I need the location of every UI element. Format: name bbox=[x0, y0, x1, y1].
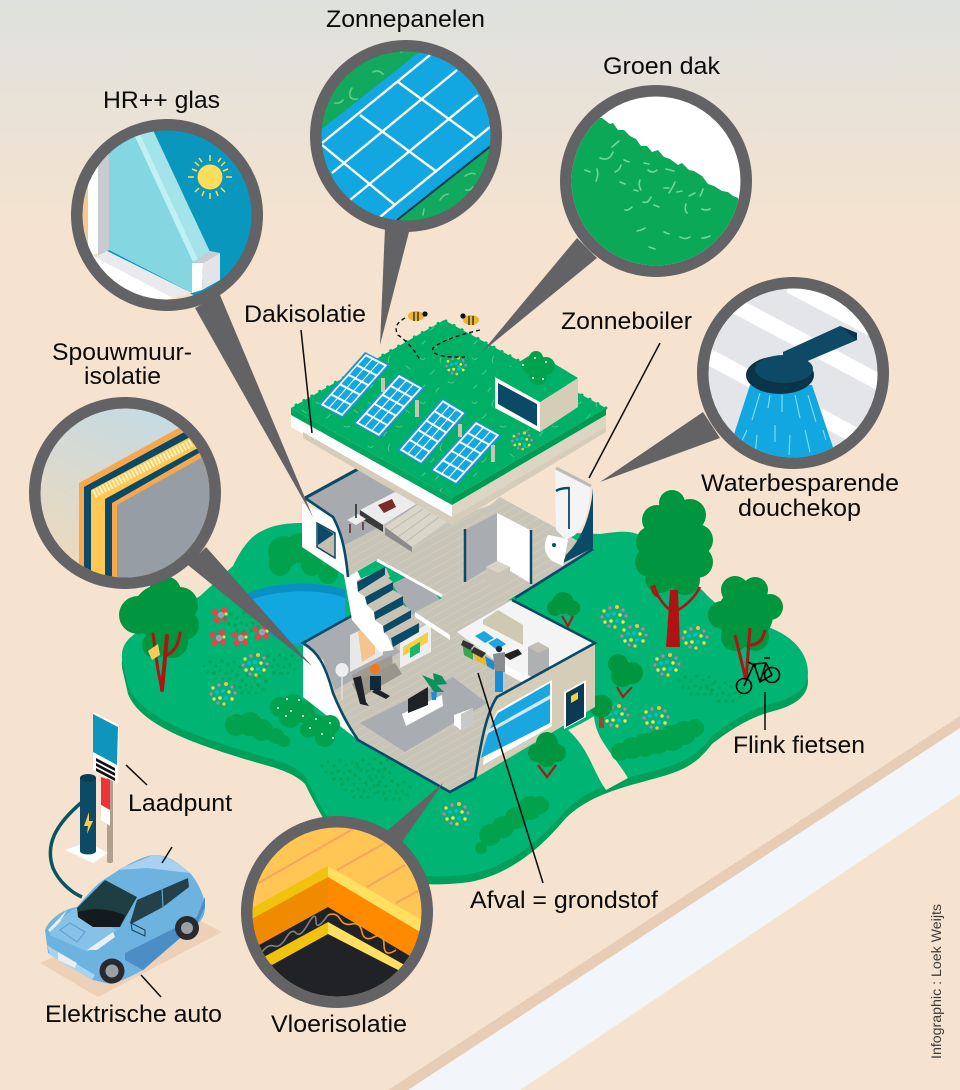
leader lines bbox=[126, 330, 765, 997]
label: Elektrische auto: Elektrische auto bbox=[45, 1001, 222, 1028]
back wall edge bbox=[305, 469, 358, 498]
tree: right with bike bbox=[708, 576, 783, 680]
callout: HR++ glas bbox=[71, 119, 263, 311]
garden flowers and speckles left bbox=[202, 611, 300, 706]
label: Vloerisolatie: Vloerisolatie bbox=[271, 1011, 407, 1038]
birdhouse bbox=[148, 644, 160, 660]
wheels bbox=[100, 916, 199, 984]
bed bbox=[360, 492, 450, 552]
headlights bbox=[48, 910, 115, 950]
label: Flink fietsen: Flink fietsen bbox=[733, 732, 865, 759]
bush: behind pond bbox=[268, 533, 338, 584]
hood bbox=[50, 908, 117, 952]
bush: white dotted front bbox=[270, 694, 340, 747]
label: Afval = grondstof: Afval = grondstof bbox=[470, 887, 658, 914]
sofa and person bbox=[352, 655, 402, 706]
floor slab bbox=[333, 470, 592, 635]
label: Waterbesparende douchekop: Waterbesparende bbox=[701, 470, 899, 497]
label: Laadpunt: Laadpunt bbox=[128, 790, 232, 817]
callout: Waterbesparende douchekop bbox=[697, 277, 895, 469]
upper floor bbox=[302, 468, 593, 652]
red flowers bbox=[210, 607, 269, 646]
tree: small beside house bbox=[590, 694, 612, 728]
rug bbox=[360, 677, 487, 752]
desk bbox=[347, 504, 366, 533]
roof flowers bbox=[445, 356, 533, 450]
label: Spouwmuurisolatie bbox=[52, 339, 192, 390]
label: Dakisolatie: Dakisolatie bbox=[244, 301, 366, 328]
label: Zonnepanelen: Zonnepanelen bbox=[326, 6, 485, 33]
front bumper bbox=[47, 945, 95, 980]
sign bbox=[93, 712, 119, 784]
body bbox=[45, 855, 205, 984]
mirror bbox=[131, 923, 145, 936]
label: HR++ glas: HR++ glas bbox=[103, 87, 220, 114]
left curved wall bbox=[303, 645, 358, 740]
white stair wall bbox=[343, 570, 394, 652]
tree: front bbox=[528, 732, 566, 777]
cube bbox=[454, 708, 473, 730]
window upper bbox=[317, 523, 335, 558]
roof highlight bbox=[117, 855, 190, 873]
floor outline bbox=[303, 600, 595, 792]
side windows bbox=[130, 878, 189, 923]
credit: Infographic : Loek Weijts bbox=[929, 904, 944, 1059]
pond bbox=[246, 584, 345, 645]
road bbox=[388, 716, 960, 1090]
garden path bbox=[568, 716, 628, 790]
plant bbox=[422, 673, 447, 700]
tree: left with birdhouse bbox=[119, 576, 199, 690]
shower head bbox=[746, 356, 814, 394]
floor bbox=[303, 600, 595, 792]
label: Zonneboiler: Zonneboiler bbox=[561, 308, 692, 335]
tv furniture bbox=[402, 687, 443, 726]
slab edge bbox=[415, 612, 450, 640]
label: Spouwmuurisolatie: Spouwmuur- bbox=[52, 339, 192, 366]
sky gradient bbox=[0, 0, 960, 230]
dormer bbox=[495, 351, 578, 432]
solar panels on roof bbox=[318, 352, 502, 485]
label: Spouwmuurisolatie: isolatie bbox=[84, 363, 161, 390]
lawn patch bbox=[320, 757, 470, 826]
base bbox=[65, 842, 108, 863]
door bbox=[564, 680, 586, 729]
inner wall bbox=[465, 513, 531, 588]
plate bbox=[58, 952, 77, 968]
shadow bbox=[40, 905, 222, 997]
tree: back right large bbox=[635, 490, 713, 647]
left wall upper bbox=[302, 503, 347, 577]
gap above stairs bbox=[392, 570, 440, 615]
kitchen bbox=[457, 600, 593, 684]
edge line bbox=[515, 549, 593, 598]
label: Waterbesparende douchekop: douchekop bbox=[738, 495, 861, 522]
wall curve bbox=[305, 498, 348, 577]
sun bbox=[188, 155, 232, 199]
bush: front right bbox=[611, 719, 704, 761]
callout: Spouwmuurisolatie bbox=[29, 397, 230, 590]
pillar bbox=[80, 774, 96, 854]
back wall bbox=[303, 611, 400, 690]
tree: behind kitchen bbox=[547, 592, 580, 626]
bicycle bbox=[736, 658, 780, 694]
tree: small near door bbox=[608, 654, 643, 697]
label: Waterbesparende douchekop bbox=[701, 470, 899, 522]
bush: bottom bbox=[475, 796, 549, 854]
curtain bbox=[350, 620, 383, 672]
ground floor bbox=[303, 600, 595, 792]
bathroom bbox=[545, 468, 593, 566]
bush: lower left bbox=[225, 712, 290, 747]
garden flowers right bbox=[600, 605, 745, 730]
standing person bbox=[493, 646, 505, 692]
electric car bbox=[40, 855, 222, 997]
green island bbox=[122, 523, 808, 884]
spray bbox=[734, 385, 833, 458]
stairs bbox=[357, 567, 419, 647]
callout tails bbox=[188, 228, 720, 842]
label: Groen dak: Groen dak bbox=[603, 53, 721, 80]
white line bbox=[377, 560, 442, 596]
hood panel bbox=[60, 923, 85, 942]
bees bbox=[396, 311, 480, 360]
side lower bbox=[125, 897, 205, 970]
floor lamp bbox=[336, 663, 348, 700]
cable bbox=[50, 802, 82, 897]
windshield bbox=[77, 880, 137, 927]
callout: Groen dak bbox=[560, 85, 752, 277]
window bbox=[481, 680, 552, 765]
sign pole bbox=[107, 777, 113, 863]
red panel bbox=[101, 777, 110, 826]
bookcase bbox=[400, 622, 431, 668]
facade bbox=[475, 643, 595, 778]
back wall gray bbox=[305, 470, 420, 545]
callout: Zonnepanelen bbox=[310, 40, 502, 232]
roof bbox=[291, 320, 606, 525]
charging point bbox=[50, 712, 119, 897]
callout: Vloerisolatie bbox=[241, 816, 433, 1008]
